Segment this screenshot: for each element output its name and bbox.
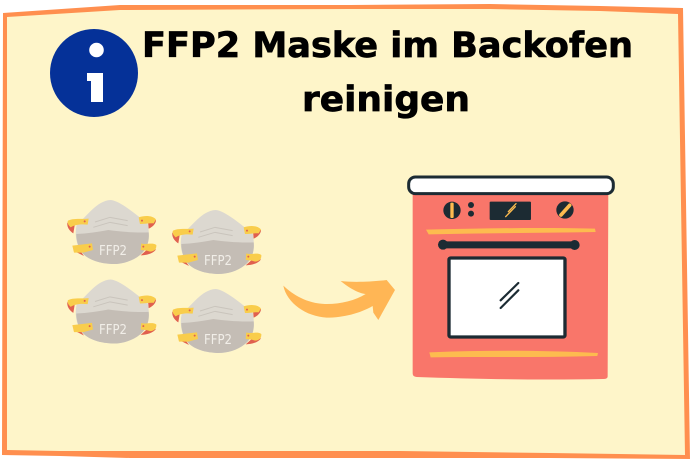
mask: bottom right — [172, 289, 261, 353]
oven top — [409, 177, 613, 194]
mask: bottom left — [67, 279, 156, 344]
mask: top right: FFP2 — [204, 253, 232, 269]
lower stripe — [429, 351, 598, 357]
title — [142, 26, 633, 120]
window glare — [501, 283, 518, 308]
mask: top left: FFP2 — [99, 243, 127, 259]
mask: bottom left: FFP2 — [99, 322, 127, 338]
oven window — [449, 258, 565, 337]
oven body — [413, 193, 608, 380]
upper stripe — [426, 228, 596, 234]
title: reinigen — [302, 80, 470, 120]
mask: bottom right: FFP2 — [204, 332, 232, 348]
mask: top right — [172, 210, 261, 274]
mask: top left — [67, 200, 156, 264]
oven handle — [438, 240, 580, 250]
group of four FFP2 masks — [67, 200, 261, 353]
arrow — [283, 280, 395, 320]
title: FFP2 Maske im Backofen — [142, 26, 633, 66]
oven — [409, 177, 613, 380]
icon: information — [50, 29, 138, 117]
control panel — [443, 201, 574, 220]
